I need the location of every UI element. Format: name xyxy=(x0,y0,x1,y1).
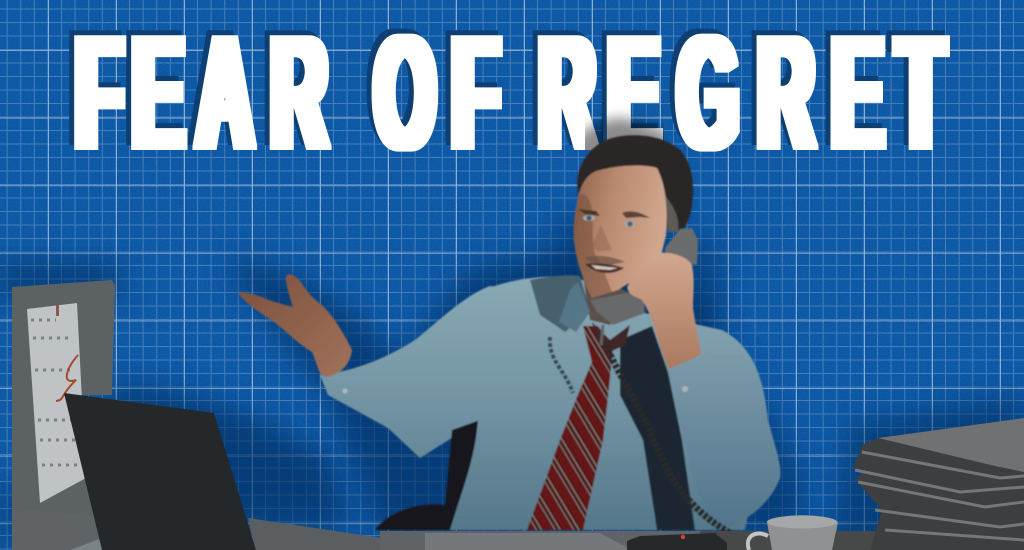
phone cord xyxy=(550,325,738,537)
laptop base xyxy=(248,518,395,550)
raised open hand xyxy=(238,274,352,377)
man on the phone xyxy=(238,135,780,537)
right forearm and sleeve xyxy=(668,334,780,528)
wall calendar with red marks xyxy=(27,303,86,503)
mouth with moustache xyxy=(584,256,625,273)
laptop lid xyxy=(64,393,256,550)
left desk surface xyxy=(12,508,170,550)
neck left collar tip xyxy=(592,322,630,352)
phone handset xyxy=(590,228,698,325)
face xyxy=(574,166,667,298)
hand holding the phone xyxy=(627,253,701,369)
partition cabinet xyxy=(12,280,115,525)
chair xyxy=(375,420,480,530)
shirt cuff button xyxy=(342,388,348,394)
shirt torso xyxy=(450,276,768,530)
dark undershirt shadow xyxy=(620,326,695,530)
grey temple xyxy=(665,195,678,232)
hair xyxy=(577,135,693,232)
shaded collar area on shoulder xyxy=(530,275,590,332)
neck and skin at collar xyxy=(582,270,628,325)
calculator xyxy=(627,533,727,550)
face shadow side xyxy=(574,194,612,298)
eyes and brows xyxy=(578,209,650,227)
head shadow on title xyxy=(585,110,664,150)
right desk surface xyxy=(700,531,880,550)
nose xyxy=(592,225,612,252)
paper folders xyxy=(70,520,168,550)
shirt cuff button right xyxy=(682,386,688,392)
necktie with stripes xyxy=(527,326,613,530)
center desk and papers xyxy=(380,531,700,550)
title: FEAR OF REGRET xyxy=(76,3,944,182)
wall shadows xyxy=(0,210,1024,550)
stack of paper xyxy=(853,418,1024,550)
shirt collar xyxy=(559,282,590,332)
left shirt sleeve xyxy=(320,286,530,458)
coffee cup xyxy=(748,515,838,550)
